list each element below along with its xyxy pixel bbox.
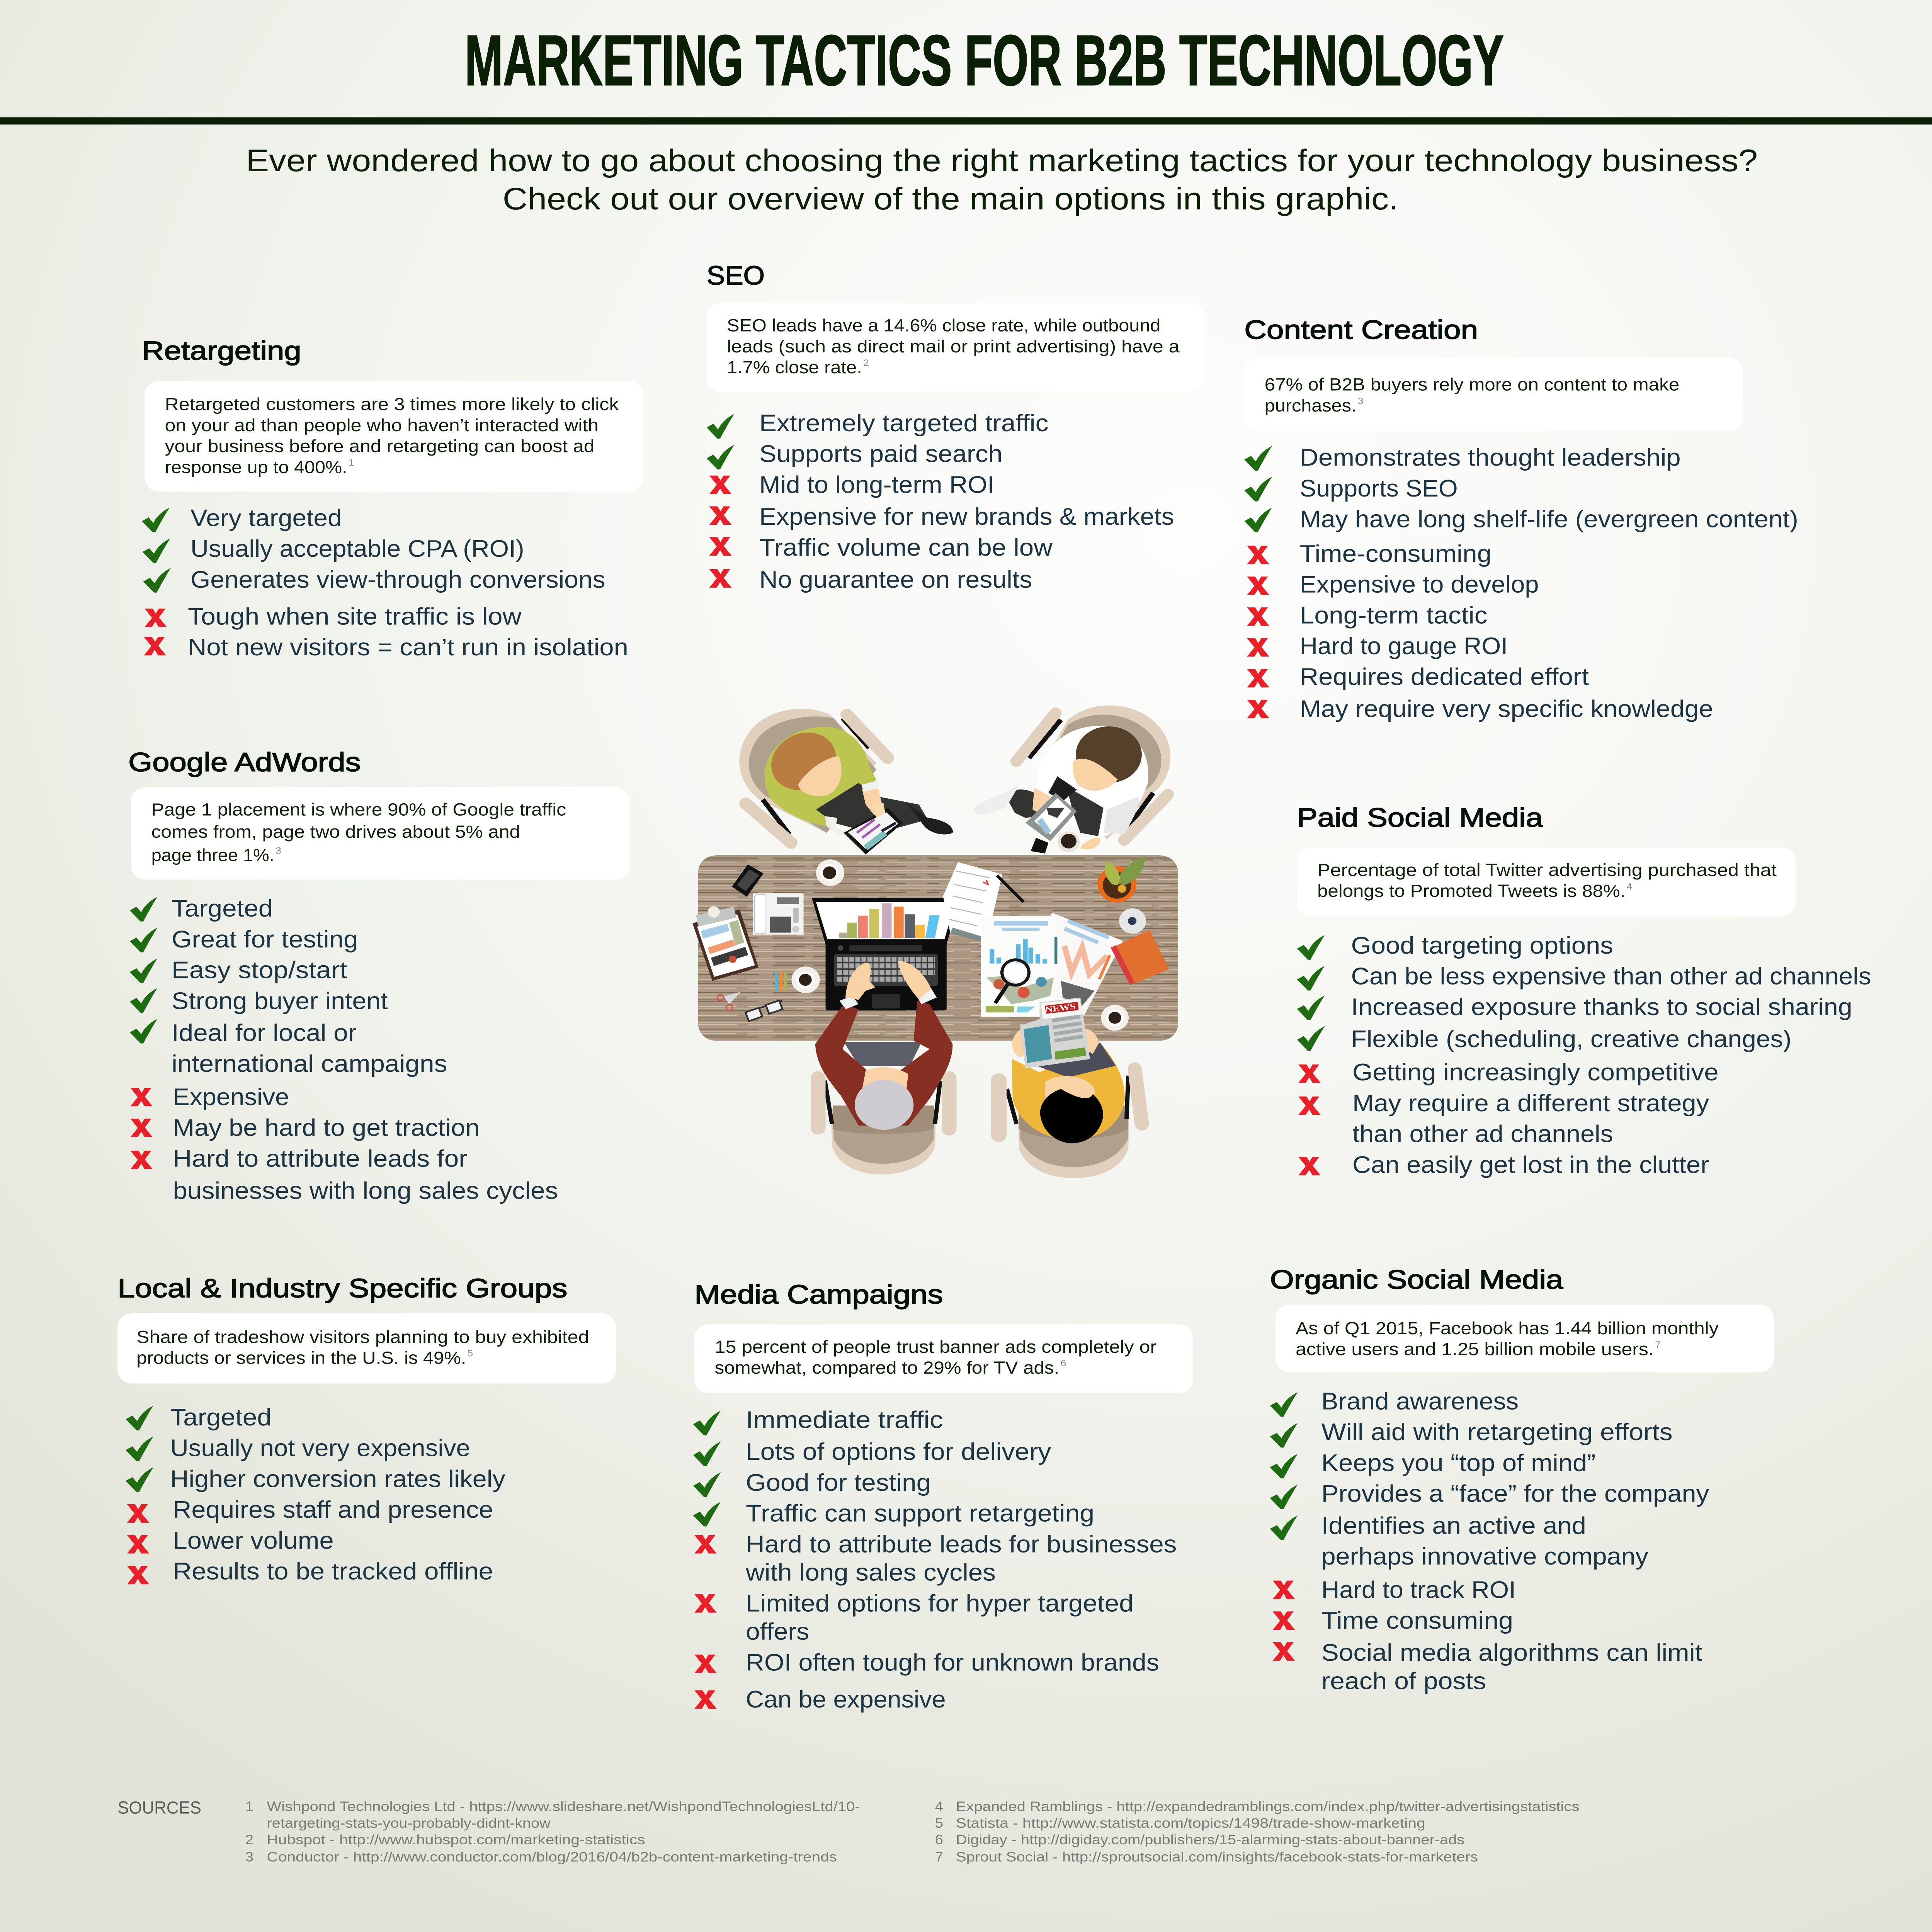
newspaper headline: NEWS: [1045, 1002, 1076, 1014]
cons list: [1273, 1576, 1702, 1694]
panel: Paid Social Media: [1297, 803, 1871, 1178]
sources list: left column: Wishpond Technologies Ltd - https://www.slideshare.net/WishpondTechnologiesLtd/10-: [267, 1799, 860, 1814]
cons list: Hard to gauge ROI: [1300, 633, 1508, 659]
stat callout: products or services in the U.S. is 49%.: [136, 1349, 466, 1368]
table: [698, 855, 1178, 1041]
clipboard: [692, 906, 759, 981]
stat callout: SEO leads have a 14.6% close rate, while outbound: [727, 316, 1160, 335]
top right person: [974, 706, 1170, 854]
cons list: Expensive: [173, 1083, 289, 1110]
coloured pens: [775, 971, 787, 991]
stat callout: on your ad than people who haven’t interacted with: [165, 416, 599, 435]
pros list: [1270, 1388, 1709, 1570]
pros list: perhaps innovative company: [1321, 1543, 1648, 1570]
pros list: Supports SEO: [1300, 475, 1458, 502]
pros list: May have long shelf-life (evergreen content): [1300, 505, 1798, 532]
subtitle: Ever wondered how to go about choosing the right marketing tactics for your technology business?: [246, 143, 1758, 178]
pros list: Identifies an active and: [1321, 1512, 1586, 1539]
sources list: right column: Expanded Ramblings - http://expandedramblings.com/index.php/twitter-advertisingstatistics: [956, 1799, 1579, 1814]
cons list: [130, 1083, 558, 1204]
desk phone: [753, 893, 804, 935]
stat callout: 15 percent of people trust banner ads completely or: [715, 1337, 1156, 1357]
pros list: Keeps you “top of mind”: [1321, 1449, 1595, 1476]
pros list: Supports paid search: [759, 440, 1002, 467]
stat callout: purchases.: [1265, 396, 1356, 415]
bar chart on laptop screen: [839, 903, 939, 938]
pros list: Great for testing: [172, 926, 358, 952]
title rule: [0, 117, 1932, 124]
sources list: left column: Hubspot - http://www.hubspot.com/marketing-statistics: [267, 1832, 645, 1847]
cons list: Expensive to develop: [1300, 571, 1539, 598]
pros list: Brand awareness: [1321, 1388, 1519, 1415]
cons list: Mid to long-term ROI: [759, 471, 994, 498]
heading: Organic Social Media: [1270, 1265, 1563, 1294]
pros list: Strong buyer intent: [172, 987, 388, 1014]
sources list: left column: 1: [245, 1799, 253, 1814]
cons list: offers: [746, 1618, 809, 1645]
cons list: with long sales cycles: [745, 1559, 996, 1586]
cons list: Lower volume: [173, 1527, 334, 1554]
pros list: [126, 1404, 505, 1492]
pros list: Higher conversion rates likely: [170, 1465, 505, 1492]
stat callout: [1244, 357, 1743, 431]
heading: Google AdWords: [128, 748, 361, 777]
sources list: left column: [245, 1799, 860, 1864]
cons list: [694, 1531, 1177, 1713]
stat callout: 3: [276, 846, 281, 856]
cons list: Hard to attribute leads for: [173, 1145, 468, 1172]
stat callout: Share of tradeshow visitors planning to buy exhibited: [136, 1327, 589, 1347]
stat callout: [707, 303, 1205, 392]
coffee cup: [1101, 1005, 1129, 1031]
stat callout: somewhat, compared to 29% for TV ads.: [715, 1358, 1059, 1378]
pros list: [707, 410, 1048, 469]
stat callout: 1.7% close rate.: [727, 358, 862, 378]
stat callout: [1297, 848, 1796, 917]
pros list: Flexible (scheduling, creative changes): [1351, 1026, 1791, 1052]
pros list: Generates view-through conversions: [190, 566, 605, 593]
stat callout: 4: [1627, 881, 1632, 892]
panel: Google AdWords: [128, 748, 629, 1204]
cons list: May require very specific knowledge: [1300, 695, 1713, 722]
sources list: right column: Statista - http://www.statista.com/topics/1498/trade-show-marketing: [956, 1815, 1425, 1831]
pros list: Very targeted: [190, 504, 342, 531]
pros list: [1297, 932, 1871, 1052]
stat callout: your business before and retargeting can boost ad: [165, 437, 594, 456]
sources list: right column: Sprout Social - http://sproutsocial.com/insights/facebook-stats-for-marketers: [956, 1849, 1478, 1864]
stat callout: leads (such as direct mail or print advertising) have a: [727, 337, 1180, 356]
cons list: Expensive for new brands & markets: [759, 503, 1174, 530]
subtitle: Check out our overview of the main options in this graphic.: [503, 181, 1398, 216]
stat callout: Page 1 placement is where 90% of Google traffic: [151, 800, 566, 820]
cons list: [144, 603, 628, 661]
panel: Retargeting: [142, 336, 643, 661]
cons list: Traffic volume can be low: [759, 534, 1053, 561]
cons list: Results to be tracked offline: [173, 1558, 493, 1585]
pros list: Immediate traffic: [746, 1406, 943, 1433]
heading: Local & Industry Specific Groups: [117, 1274, 568, 1303]
cons list: than other ad channels: [1352, 1120, 1613, 1147]
cons list: [709, 471, 1174, 593]
cons list: Requires dedicated effort: [1300, 663, 1589, 690]
sources list: left column: 3: [245, 1849, 253, 1864]
sources list: right column: 6: [935, 1832, 943, 1847]
panel: Organic Social Media: [1270, 1265, 1774, 1694]
stat callout: [131, 787, 629, 879]
pros list: Traffic can support retargeting: [746, 1500, 1094, 1527]
stat callout: 7: [1655, 1340, 1661, 1350]
checklist paper: [943, 862, 1024, 942]
heading: Content Creation: [1244, 315, 1478, 345]
pros list: [693, 1406, 1094, 1527]
stat callout: 1: [349, 457, 354, 468]
pros list: Targeted: [170, 1404, 272, 1430]
stat callout: As of Q1 2015, Facebook has 1.44 billion monthly: [1296, 1319, 1719, 1338]
heading: SEO: [707, 261, 765, 291]
heading: Retargeting: [142, 336, 301, 366]
cons list: [1247, 540, 1713, 722]
cons list: Hard to track ROI: [1321, 1576, 1516, 1603]
stat callout: 5: [468, 1348, 473, 1359]
sources list: left column: retargeting-stats-you-probably-didnt-know: [267, 1815, 551, 1831]
stat callout: Percentage of total Twitter advertising purchased that: [1317, 861, 1777, 880]
bottom right person: [999, 1043, 1142, 1178]
stat callout: 2: [863, 358, 869, 368]
pros list: Will aid with retargeting efforts: [1321, 1418, 1673, 1446]
cons list: Tough when site traffic is low: [188, 603, 522, 630]
heading: Media Campaigns: [694, 1280, 943, 1310]
cons list: Limited options for hyper targeted: [746, 1590, 1134, 1617]
cons list: [1298, 1059, 1719, 1178]
glasses: [745, 1000, 782, 1021]
bottom left hands: [845, 961, 931, 1000]
cons list: reach of posts: [1321, 1667, 1486, 1694]
subtitle: [246, 143, 1758, 216]
pros list: Usually not very expensive: [170, 1434, 470, 1461]
coffee cup: [816, 859, 844, 886]
cons list: Can be expensive: [746, 1686, 946, 1713]
pros list: [1244, 444, 1798, 532]
scissors: [717, 992, 741, 1011]
coffee cup: [791, 966, 820, 993]
compact disc: [1119, 908, 1146, 934]
sources list: right column: [935, 1799, 1579, 1864]
stat callout: [117, 1313, 616, 1384]
pros list: Easy stop/start: [172, 956, 347, 983]
pros list: international campaigns: [172, 1050, 447, 1077]
cons list: No guarantee on results: [759, 566, 1032, 593]
cons list: Time-consuming: [1300, 540, 1492, 567]
panel: Media Campaigns: [693, 1280, 1193, 1713]
newspaper: [1012, 997, 1099, 1068]
stat callout: [1276, 1304, 1774, 1372]
stat callout: response up to 400%.: [165, 457, 347, 477]
stat callout: page three 1%.: [151, 846, 274, 865]
cons list: Can easily get lost in the clutter: [1352, 1151, 1709, 1178]
reports with charts: [981, 913, 1123, 1017]
stat callout: active users and 1.25 billion mobile users.: [1296, 1340, 1654, 1359]
stat callout: 67% of B2B buyers rely more on content to make: [1265, 375, 1679, 395]
pros list: Good for testing: [746, 1469, 931, 1496]
cons list: Getting increasingly competitive: [1352, 1059, 1719, 1086]
potted plant: [1097, 856, 1145, 903]
pros list: Ideal for local or: [172, 1019, 357, 1046]
cons list: Social media algorithms can limit: [1321, 1639, 1702, 1666]
sources heading: SOURCES: [117, 1798, 201, 1818]
cons list: Requires staff and presence: [173, 1496, 493, 1523]
orange folder: [1111, 930, 1169, 985]
pros list: [130, 895, 447, 1077]
stat callout: comes from, page two drives about 5% and: [151, 822, 520, 842]
pros list: Targeted: [172, 895, 273, 922]
stat callout: 6: [1061, 1358, 1066, 1369]
sources list: left column: 2: [245, 1832, 253, 1847]
sources list: right column: 5: [935, 1815, 943, 1831]
bottom left person: [811, 988, 957, 1174]
cons list: Long-term tactic: [1300, 602, 1488, 629]
pros list: Increased exposure thanks to social sharing: [1351, 993, 1852, 1020]
phone: [732, 864, 764, 897]
cons list: Not new visitors = can’t run in isolation: [188, 634, 628, 661]
pros list: Extremely targeted traffic: [759, 410, 1048, 436]
laptop: [812, 898, 960, 1010]
cons list: Time consuming: [1321, 1607, 1513, 1634]
cons list: [127, 1496, 493, 1585]
panel: Local & Industry Specific Groups: [117, 1274, 616, 1585]
sources list: left column: Conductor - http://www.conductor.com/blog/2016/04/b2b-content-marketing-trends: [267, 1849, 837, 1864]
cons list: businesses with long sales cycles: [173, 1177, 558, 1204]
sources list: right column: Digiday - http://digiday.com/publishers/15-alarming-stats-about-banner-ads: [956, 1832, 1464, 1847]
sources list: right column: 7: [935, 1849, 943, 1864]
cons list: ROI often tough for unknown brands: [746, 1649, 1159, 1676]
panel: SEO: [707, 261, 1205, 593]
pros list: [142, 504, 605, 593]
illustration: team around a meeting table: [692, 706, 1178, 1178]
stat callout: [694, 1324, 1193, 1393]
pros list: Lots of options for delivery: [746, 1438, 1051, 1465]
sources list: right column: 4: [935, 1799, 943, 1814]
cons list: May be hard to get traction: [173, 1114, 480, 1141]
stat callout: Retargeted customers are 3 times more likely to click: [165, 395, 619, 414]
stat callout: [145, 381, 643, 492]
magnifying glass: [995, 960, 1029, 1003]
pros list: Provides a “face” for the company: [1321, 1480, 1709, 1507]
pros list: Demonstrates thought leadership: [1300, 444, 1681, 471]
cons list: Hard to attribute leads for businesses: [746, 1531, 1177, 1558]
top left person: [739, 709, 953, 854]
panel: Content Creation: [1244, 315, 1798, 722]
pros list: Good targeting options: [1351, 932, 1613, 959]
pros list: Can be less expensive than other ad channels: [1351, 963, 1871, 990]
pros list: Usually acceptable CPA (ROI): [190, 535, 524, 562]
stat callout: belongs to Promoted Tweets is 88%.: [1317, 881, 1625, 901]
stat callout: 3: [1358, 396, 1364, 406]
cons list: May require a different strategy: [1352, 1090, 1709, 1116]
heading: Paid Social Media: [1297, 803, 1543, 833]
